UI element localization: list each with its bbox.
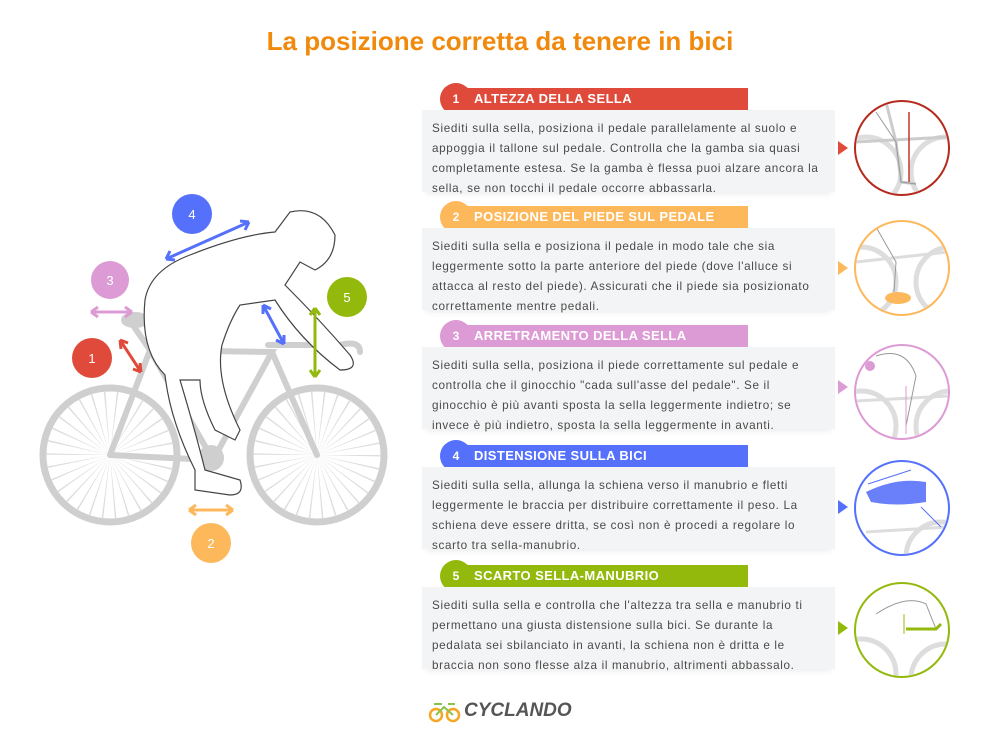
section 2 header	[440, 201, 748, 228]
marker 1: 1	[88, 351, 96, 366]
image 3	[854, 344, 950, 440]
section 2 text: attacca al resto del piede). Assicurati che il piede sia posizionato	[432, 280, 809, 293]
marker 5: 5	[343, 290, 351, 305]
marker 1	[72, 338, 112, 378]
arrow 4	[166, 221, 249, 260]
section 5 header	[440, 560, 748, 587]
logo: CYCLANDO	[464, 700, 572, 721]
section 4 text: schiena deve essere dritta, se così non è procedi a regolare lo	[432, 519, 795, 532]
section 2 text: Siediti sulla sella e posiziona il pedale in modo tale che sia	[432, 240, 775, 253]
section 4 header	[440, 440, 748, 467]
arrow 2	[838, 261, 848, 275]
marker 3: 3	[106, 273, 114, 288]
section 4 text: leggermente le braccia per distribuire correttamente il peso. La	[432, 499, 798, 512]
section 3 text: ginocchio è più avanti sposta la sella leggermente indietro; se	[432, 399, 791, 412]
rear wheel	[43, 388, 177, 522]
section 2 header: 2	[453, 210, 459, 224]
section 1 header: ALTEZZA DELLA SELLA	[474, 91, 632, 106]
section 4 header: 4	[453, 449, 459, 463]
section 1 text: completamente estesa. Se la gamba è flessa puoi alzare ancora la	[432, 162, 819, 175]
section 5 text: permettano una giusta distensione sulla bici. Se durante la	[432, 619, 773, 632]
arrow 3	[838, 380, 848, 394]
marker 4	[172, 194, 212, 234]
section 1 text: appoggia il tallone sul pedale. Controlla che la gamba sia quasi	[432, 142, 800, 155]
image 1	[854, 100, 950, 196]
rider outline	[144, 211, 353, 495]
section 3 text: controlla che il ginocchio "cada sull'asse del pedale". Se il	[432, 379, 770, 392]
section 5 header: SCARTO SELLA-MANUBRIO	[474, 568, 659, 583]
section 2 text: leggermente sotto la parte anteriore del piede (dove l'alluce si	[432, 260, 792, 273]
section 4 header: DISTENSIONE SULLA BICI	[474, 448, 647, 463]
image 5	[854, 582, 950, 678]
section 4 text: Siediti sulla sella, allunga la schiena verso il manubrio e fletti	[432, 479, 788, 492]
marker 4: 4	[188, 207, 196, 222]
arrow 5	[310, 308, 320, 377]
marker 2: 2	[207, 536, 215, 551]
frame	[110, 315, 360, 468]
arrow 5	[838, 621, 848, 635]
section 3 header	[440, 320, 748, 347]
arrow 4b	[263, 305, 284, 344]
image 2	[854, 220, 950, 316]
section 5 text: braccia non sono flesse alza il manubrio, altrimenti abbassalo.	[432, 659, 795, 672]
section 3 text	[422, 347, 835, 429]
title: La posizione corretta da tenere in bici	[267, 26, 733, 56]
section 2 text	[422, 228, 835, 310]
section 5 header: 5	[453, 569, 459, 583]
section 2 header: POSIZIONE DEL PIEDE SUL PEDALE	[474, 209, 715, 224]
arrow 3	[91, 307, 132, 317]
section 1 text: sella, se non tocchi il pedale occorre abbassarla.	[432, 182, 717, 195]
front wheel	[250, 388, 384, 522]
marker 3	[91, 261, 129, 299]
section 1 header	[440, 83, 748, 110]
section 1 text: Siediti sulla sella, posiziona il pedale parallelamente al suolo e	[432, 122, 797, 135]
section 3 header: ARRETRAMENTO DELLA SELLA	[474, 328, 687, 343]
icon: bike logo	[428, 703, 460, 722]
section 5 text: pedalata sei sbilanciato in avanti, la schiena non è dritta e le	[432, 639, 785, 652]
arrow 2	[189, 505, 233, 515]
section 1 header: 1	[453, 92, 459, 106]
section 4 text: scarto tra sella-manubrio.	[432, 539, 581, 552]
image 4	[854, 460, 950, 556]
section 1 text	[422, 110, 835, 192]
marker 2	[191, 523, 231, 563]
section 5 text	[422, 587, 835, 669]
illustration: cyclist on bike	[40, 194, 388, 563]
section 3 text: invece è più indietro, sposta la sella leggermente in avanti.	[432, 419, 774, 432]
section 3 header: 3	[453, 329, 459, 343]
section 3 text: Siediti sulla sella, posiziona il piede correttamente sul pedale e	[432, 359, 799, 372]
section 2 text: correttamente mentre pedali.	[432, 300, 600, 313]
section 4 text	[422, 467, 835, 549]
arrow 1	[120, 340, 141, 372]
arrow 1	[838, 141, 848, 155]
arrow 4	[838, 500, 848, 514]
marker 5	[327, 277, 367, 317]
section 5 text: Siediti sulla sella e controlla che l'altezza tra sella e manubrio ti	[432, 599, 803, 612]
